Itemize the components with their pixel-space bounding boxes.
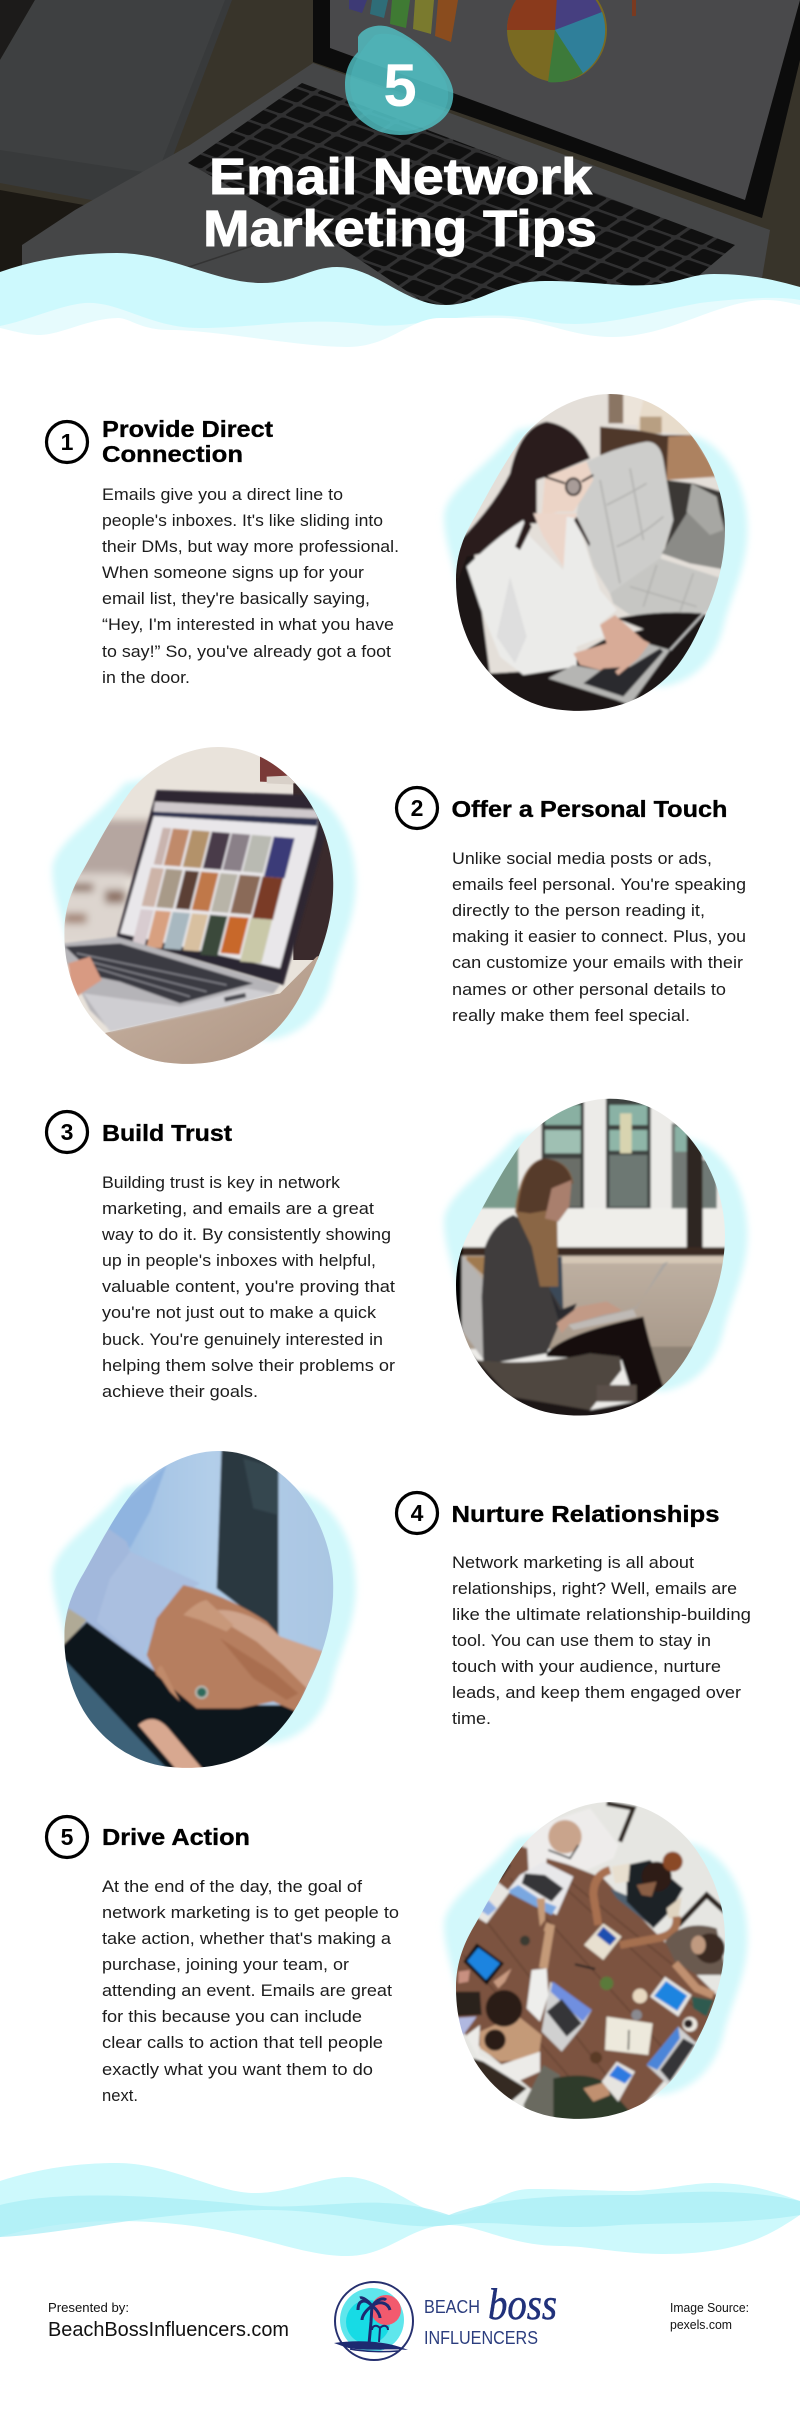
body text 2: directly to the person reading it,: [452, 901, 705, 920]
body text 5: attending an event. Emails are great: [102, 1981, 392, 2000]
body text 1: Emails give you a direct line to: [102, 485, 343, 504]
heading 5: Drive Action: [102, 1824, 250, 1850]
body text 2: can customize your emails with their: [452, 953, 743, 972]
body text 3: you're not just out to make a quick: [102, 1303, 377, 1322]
tablet on desk: [0, 0, 232, 208]
laptop screen: [313, 0, 800, 218]
number 5 badge: 5: [61, 1824, 74, 1850]
body text 3: marketing, and emails are a great: [102, 1199, 374, 1218]
body text 3: Building trust is key in network: [102, 1173, 341, 1192]
body text 1: [102, 485, 399, 687]
bottom wave: [0, 2163, 800, 2256]
bar chart on screen: [349, 0, 458, 42]
photo 4: handshake: [50, 1451, 358, 1768]
heading 3: Build Trust: [102, 1120, 232, 1146]
heading 1: [102, 416, 273, 467]
heading 4: Nurture Relationships: [452, 1501, 720, 1527]
tip 4: [396, 1492, 751, 1728]
number 5 badge: [46, 1816, 88, 1858]
body text 4: like the ultimate relationship-building: [452, 1605, 751, 1624]
body text 5: clear calls to action that tell people: [102, 2033, 383, 2052]
body text 1: to say!” So, you've already got a foot: [102, 642, 391, 661]
footer: presented by: Presented by:: [48, 2300, 129, 2315]
logo wordmark: [424, 2280, 557, 2348]
photo gallery grid: [130, 828, 295, 963]
tip 2: [396, 788, 746, 1025]
number 3 badge: 3: [61, 1119, 73, 1145]
laptop keyboard: [188, 83, 735, 320]
photo 2: laptop showing photo gallery: [50, 747, 358, 1064]
title: [203, 148, 597, 257]
body text 4: relationships, right? Well, emails are: [452, 1579, 737, 1598]
title: Email Network: [209, 148, 593, 205]
body text 5: next.: [102, 2086, 138, 2105]
body text 2: names or other personal details to: [452, 980, 726, 999]
body text 3: buck. You're genuinely interested in: [102, 1330, 383, 1349]
footer: image source: pexels.com: [670, 2317, 732, 2332]
laptop body: [22, 63, 770, 320]
number 4 badge: 4: [411, 1500, 424, 1526]
logo wordmark: BEACH: [424, 2297, 480, 2317]
body text 2: Unlike social media posts or ads,: [452, 849, 712, 868]
badge: number 5 in teal blob: [345, 26, 453, 135]
heading 1: Connection: [102, 441, 243, 467]
badge: number 5 in teal blob: 5: [383, 52, 417, 119]
footer: image source: Image Source:: [670, 2300, 749, 2315]
body text 4: time.: [452, 1709, 491, 1728]
number 3 badge: [46, 1112, 88, 1152]
body text 1: their DMs, but way more professional.: [102, 537, 399, 556]
body text 1: people's inboxes. It's like sliding into: [102, 511, 383, 530]
tip 3: [46, 1112, 395, 1401]
pie chart on screen: [507, 0, 607, 82]
footer: Beach Boss Influencers logo: [334, 2280, 557, 2360]
body text 5: exactly what you want them to do: [102, 2060, 373, 2079]
body text 4: tool. You can use them to stay in: [452, 1631, 711, 1650]
body text 3: way to do it. By consistently showing: [101, 1225, 391, 1244]
body text 2: really make them feel special.: [452, 1006, 690, 1025]
body text 3: [101, 1173, 395, 1401]
body text 5: for this because you can include: [102, 2007, 362, 2026]
header photo: laptop with charts on desk: [0, 0, 800, 320]
footer: image source: [670, 2300, 749, 2332]
body text 4: Network marketing is all about: [452, 1553, 694, 1572]
photo 1: woman on sofa with laptop: [441, 394, 750, 711]
body text 1: “Hey, I'm interested in what you have: [102, 615, 394, 634]
body text 4: leads, and keep them engaged over: [452, 1683, 741, 1702]
body text 1: email list, they're basically saying,: [102, 589, 370, 608]
body text 3: valuable content, you're proving that: [102, 1277, 395, 1296]
footer: presented by: BeachBossInfluencers.com: [48, 2319, 289, 2341]
body text 5: purchase, joining your team, or: [102, 1955, 349, 1974]
heading 2: Offer a Personal Touch: [452, 796, 728, 822]
logo wordmark: INFLUENCERS: [424, 2328, 538, 2348]
footer: presented by: [48, 2300, 289, 2341]
body text 5: take action, whether that's making a: [102, 1929, 392, 1948]
tip 5: [46, 1816, 399, 2105]
body text 5: [102, 1877, 399, 2105]
tip 1: [46, 416, 399, 687]
logo wordmark: boss: [488, 2280, 557, 2329]
title: Marketing Tips: [203, 200, 597, 257]
number 4 badge: [396, 1492, 438, 1534]
body text 4: [452, 1553, 751, 1728]
body text 1: in the door.: [102, 668, 190, 687]
heading 1: Provide Direct: [102, 416, 273, 442]
body text 3: achieve their goals.: [102, 1382, 258, 1401]
logo emblem: palm and sun: [334, 2282, 413, 2360]
photo 3: woman in blazer by window: [441, 1098, 750, 1416]
photo 5: team around wooden table: [441, 1802, 750, 2119]
body text 5: At the end of the day, the goal of: [102, 1877, 362, 1896]
number 1 badge: [46, 422, 88, 462]
number 2 badge: 2: [411, 795, 423, 821]
body text 4: touch with your audience, nurture: [452, 1657, 721, 1676]
body text 2: making it easier to connect. Plus, you: [452, 927, 746, 946]
body text 3: up in people's inboxes with helpful,: [102, 1251, 376, 1270]
top wave: [0, 253, 800, 500]
number 2 badge: [396, 788, 438, 828]
body text 2: emails feel personal. You're speaking: [452, 875, 746, 894]
number 1 badge: 1: [61, 429, 74, 455]
body text 2: [452, 849, 746, 1025]
body text 5: network marketing is to get people to: [102, 1903, 399, 1922]
body text 1: When someone signs up for your: [102, 563, 364, 582]
body text 3: helping them solve their problems or: [102, 1356, 395, 1375]
